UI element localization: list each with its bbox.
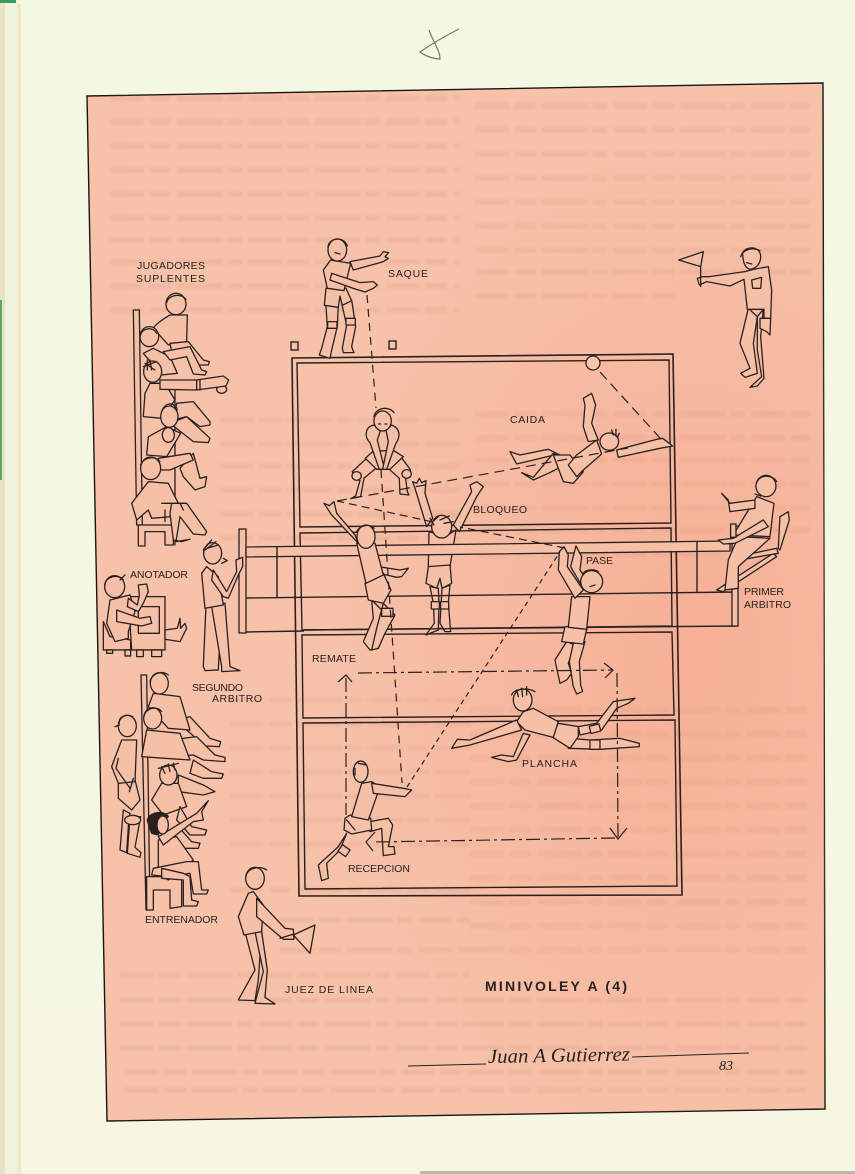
substitute 4	[147, 402, 210, 457]
labels: PRIMER	[744, 586, 784, 598]
signature	[408, 1044, 749, 1068]
labels: JUGADORES	[137, 260, 205, 272]
labels: SUPLENTES	[136, 273, 205, 285]
spiker to diver	[337, 448, 628, 501]
signature: Juan A Gutierrez	[488, 1044, 630, 1068]
figure: blocker (bloqueo)	[413, 478, 483, 635]
panel: salmon page block	[87, 83, 825, 1121]
page number: 83	[719, 1059, 733, 1074]
figure: diving player (caida)	[510, 393, 673, 483]
figure: spiker (remate)	[324, 502, 408, 650]
service zone markers	[291, 341, 396, 350]
volleyball net and posts	[239, 526, 738, 633]
substitute B	[142, 708, 225, 762]
figure: second referee (segundo arbitro)	[202, 540, 243, 672]
reception to set	[407, 552, 560, 787]
figure: substitutes bench (jugadores suplentes)	[132, 293, 229, 546]
figure: receiver (recepcion)	[318, 761, 412, 881]
substitute 5	[132, 453, 207, 542]
figure: line judge with flag (juez de linea)	[238, 867, 315, 1004]
figure: server (saque)	[319, 239, 389, 358]
substitute 1	[153, 293, 209, 365]
labels	[130, 260, 791, 996]
labels: RECEPCION	[348, 863, 410, 875]
pencil mark	[420, 29, 459, 59]
figure: defender crouching (central)	[351, 408, 411, 499]
labels: SAQUE	[388, 268, 428, 280]
figure: setter (pase)	[555, 546, 603, 694]
standing substitute	[112, 715, 141, 857]
volleyball court	[292, 354, 682, 896]
service path	[367, 295, 402, 783]
labels: REMATE	[312, 653, 356, 665]
labels: PASE	[586, 555, 613, 567]
trajectories of the ball	[337, 295, 660, 787]
ball to diver	[600, 372, 660, 438]
figure: first referee on chair (primer arbitro)	[717, 475, 789, 592]
figure: line judge top right	[679, 248, 772, 387]
labels: JUEZ DE LINEA	[285, 984, 373, 996]
blocker to spiker	[337, 501, 433, 522]
labels: ARBITRO	[744, 599, 791, 611]
labels: SEGUNDO	[192, 682, 243, 694]
substitute 3 with extended leg	[143, 360, 229, 418]
figure: bench group (entrenador and substitutes)	[112, 673, 225, 910]
labels: ANOTADOR	[130, 569, 188, 581]
labels: ARBITRO	[212, 693, 262, 705]
labels: CAIDA	[510, 414, 545, 426]
substitute C	[152, 760, 223, 815]
ball	[586, 356, 600, 370]
set to blocker	[460, 527, 565, 548]
figure: scorer (anotador)	[103, 575, 187, 657]
labels: ENTRENADOR	[145, 914, 218, 926]
substitute A	[148, 673, 221, 747]
show-through print (decorative)	[110, 98, 810, 1090]
labels: BLOQUEO	[473, 504, 527, 516]
coach	[147, 801, 208, 906]
figure: diving player (plancha)	[452, 687, 639, 762]
substitute 2	[140, 327, 207, 375]
rotation arrows	[338, 663, 627, 851]
labels: PLANCHA	[522, 758, 577, 770]
title: MINIVOLEY A (4)	[485, 978, 627, 994]
